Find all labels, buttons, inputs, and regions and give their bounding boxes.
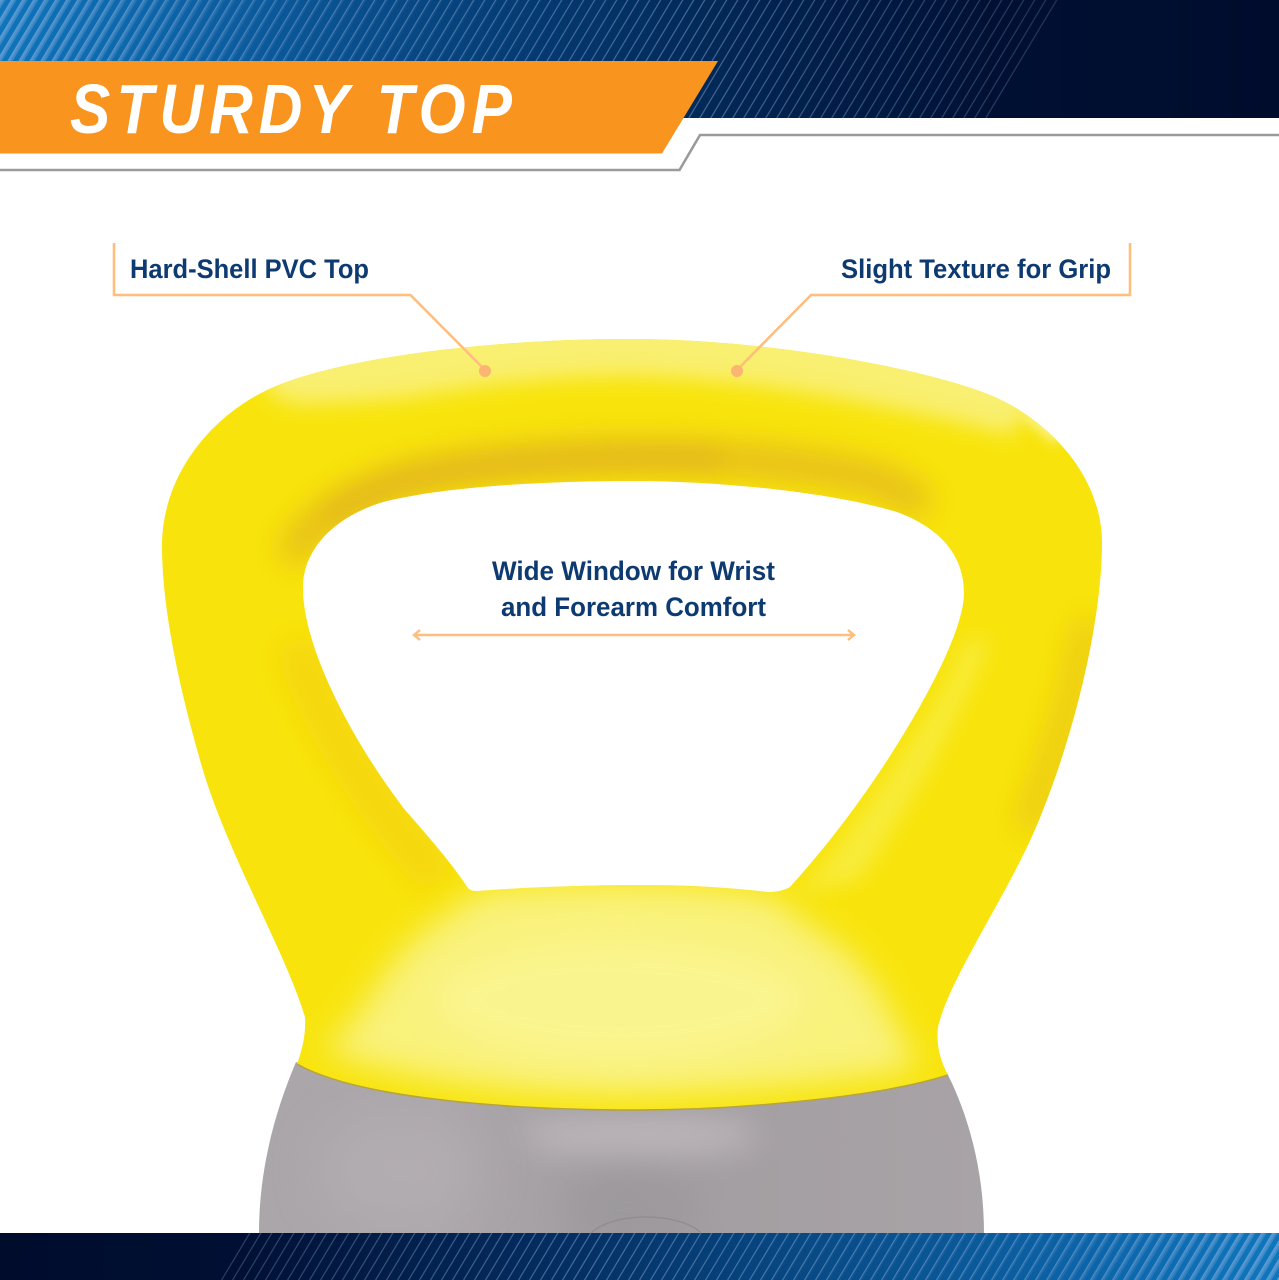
kettlebell gray body	[259, 1062, 984, 1250]
title ribbon	[0, 61, 718, 154]
callout: wide window: Wide Window for Wrist	[492, 556, 775, 586]
kettlebell photo	[150, 300, 1120, 1250]
header outline rule	[0, 135, 1279, 170]
top banner	[0, 0, 1279, 118]
callout: hard-shell PVC top: Hard-Shell PVC Top	[130, 254, 369, 284]
title: STURDY TOP	[70, 70, 518, 148]
double-headed arrow	[414, 630, 854, 640]
callout: slight texture for grip	[731, 243, 1130, 377]
callout: slight texture for grip: Slight Texture for Grip	[841, 254, 1111, 284]
callout: wide window	[414, 556, 854, 640]
callout: hard-shell PVC top	[114, 243, 491, 377]
callout: wide window: and Forearm Comfort	[501, 592, 766, 622]
yellow rim seam	[297, 1064, 948, 1110]
bottom banner	[0, 1233, 1279, 1280]
kettlebell yellow handle	[150, 300, 1120, 1120]
